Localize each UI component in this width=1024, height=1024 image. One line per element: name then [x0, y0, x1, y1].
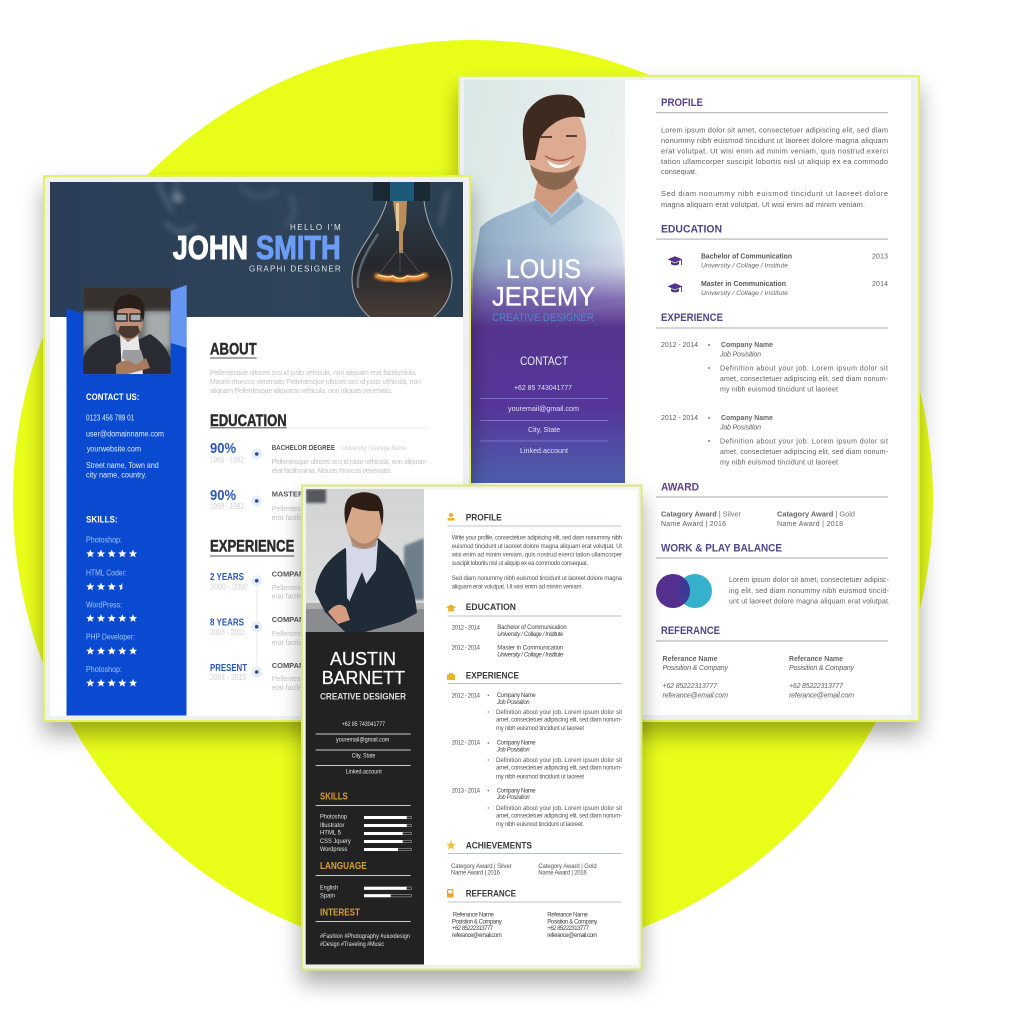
section: experience: COMPANY	[272, 570, 309, 579]
page sheet	[464, 80, 911, 715]
section: experience: Definition about your job. Lorem ipsum dolor sit	[720, 438, 888, 446]
section: experience: 2000 - 2002	[210, 582, 248, 591]
name block: JOHN	[173, 229, 248, 266]
section: education: Pellentesque ultrices	[272, 506, 337, 513]
section: achievements: Category Award | Silver	[451, 864, 512, 870]
section: about: ABOUT	[210, 340, 257, 358]
contact us block: 0123 456 789 01	[86, 414, 135, 423]
contact list: Linked.account	[346, 769, 382, 775]
language bars: English	[320, 885, 338, 891]
section: experience: amet, consectetuer adipiscing elit, sed diam nonum-	[720, 449, 889, 456]
section: profile: tation ullamcorper suscipit lobortis nisl ut aliquip ex ea commodo	[661, 157, 888, 166]
section: experience: erat facilisminia.	[272, 640, 322, 647]
section: profile: PROFILE	[466, 513, 502, 524]
skills bars: CSS Jquery	[320, 839, 351, 845]
section: achievements: ACHIEVEMENTS	[466, 840, 532, 851]
name block: HELLO I'M	[290, 223, 341, 232]
contact us block	[86, 392, 164, 480]
skills block: Photoshop:	[86, 536, 122, 545]
timeline marker	[251, 496, 262, 506]
interest tags: #Fashion #Photography #uiuxdesign	[320, 934, 410, 940]
section: education: 90%	[210, 440, 236, 457]
section: experience: 2004 - 2018	[210, 673, 246, 682]
section: referance: referance@email.com	[662, 692, 728, 699]
section: education: Bachelor of Communication	[497, 625, 567, 631]
section: experience: Definition about your job. Lorem ipsum dolor sit	[720, 366, 888, 372]
section: about: aliquam Pellentesque aliquacto vehicula, non aliquas venenatis.	[210, 388, 393, 395]
section: profile	[448, 513, 623, 590]
icon: graduation cap	[668, 283, 682, 292]
section: referance	[656, 625, 888, 699]
name: JEREMY	[492, 282, 595, 312]
card frame	[302, 486, 642, 970]
section: education: University / Collage / Institute	[701, 263, 788, 270]
interest tags: #Design #Traveling #Music	[320, 942, 384, 948]
section: education: Bachelor of Communication	[701, 254, 792, 261]
photo: man with glasses	[83, 287, 171, 374]
section: experience: amet, consectetuer adipiscing elit, sed diam nonum-	[496, 814, 622, 820]
section: referance: +62 85222313777	[547, 926, 590, 932]
skills block: SKILLS:	[86, 515, 118, 526]
name: BARNETT	[322, 668, 405, 688]
section: experience: Definition about your job. Lorem ipsum dolor sit	[496, 758, 622, 764]
section: experience: 2012 - 2014	[452, 741, 481, 747]
contact block: +62 85 743041777	[514, 383, 572, 392]
icon: star	[446, 840, 456, 850]
contact list: +62 85 743041777	[342, 722, 386, 728]
contact us block: user@domainname.com	[86, 430, 164, 439]
section: profile: consequat.	[661, 167, 697, 176]
contact list	[316, 722, 411, 775]
skills bars	[316, 791, 411, 853]
section: referance: Posistion & Company	[452, 919, 502, 925]
timeline marker	[251, 666, 262, 678]
job title: CREATIVE DESIGNER	[320, 691, 406, 701]
star rating: 5 stars	[86, 679, 137, 687]
section: referance: Referance Name	[789, 656, 843, 663]
page sheet	[306, 489, 638, 965]
section: work and play balance: ing elit, sed diam nonummy nibh euismod tincid-	[729, 588, 890, 595]
section: referance: Posisition & Company	[662, 665, 728, 672]
section: work and play balance	[656, 543, 890, 608]
section: award	[656, 482, 888, 528]
section: profile: Sed diam nonummy nibh euismod tincidunt ut laoreet dolore magna	[452, 576, 623, 582]
section: education: 1990 - 1992	[210, 502, 244, 511]
section: experience: 8 YEARS	[210, 618, 244, 629]
skills bars: Wordpress	[320, 847, 347, 853]
job title: CREATIVE DESIGNER	[492, 312, 594, 324]
section: experience: 2012 - 2014	[452, 693, 481, 699]
section: award: Name Award | 2016	[661, 521, 726, 528]
contact block: City, State	[528, 425, 560, 434]
timeline marker	[251, 575, 262, 586]
section: experience: 2003 - 2011	[210, 628, 245, 637]
section: education: Master in Communication	[701, 281, 786, 288]
section: experience	[447, 671, 622, 828]
blue sidebar	[66, 300, 186, 716]
section: education: 2012 - 2014	[452, 625, 481, 631]
section: experience: Pellentesque ultrices	[272, 631, 337, 638]
section: education: EDUCATION	[661, 224, 722, 236]
section: experience: 2013 - 2014	[452, 788, 481, 794]
contact list: youremail@gmail.com	[336, 738, 389, 744]
section: profile: Write your profile, consectetuer adipiscing elit, sed diam nonummy nibh	[452, 535, 622, 541]
language bars: LANGUAGE	[320, 861, 367, 872]
resume card: Austin Barnett	[302, 486, 642, 970]
section: profile: euismod tincidunt ut laoreet dolore magna aliquam erat volutpat. Ut	[452, 544, 622, 550]
skills block: WordPress:	[86, 600, 122, 609]
section: award: Catagory Award | Silver	[661, 512, 742, 519]
section: education: University / Collage / Institute	[701, 290, 788, 297]
section: referance: referance@email.com	[452, 933, 502, 939]
section: referance: referance@email.com	[789, 692, 854, 699]
contact list: City, State	[352, 754, 376, 760]
section: experience: EXPERIENCE	[661, 312, 723, 324]
section: experience	[656, 312, 889, 466]
section: award: Catagory Award | Gold	[777, 512, 855, 519]
section: education: 2014	[872, 281, 888, 288]
section: experience: Job Posisition	[496, 795, 530, 801]
section: award: Name Award | 2018	[777, 521, 843, 528]
dark sidebar	[306, 632, 424, 964]
section: experience: Definition about your job. Lorem ipsum dolor sit	[496, 806, 622, 812]
resume card: Louis Jeremy	[459, 76, 919, 721]
section: experience: Definition about your job. Lorem ipsum dolor sit	[496, 710, 622, 716]
section: referance: REFERANCE	[466, 889, 516, 900]
photo background	[464, 80, 625, 296]
star rating: 5 stars	[86, 647, 137, 655]
icon: person	[448, 513, 454, 521]
section: experience: EXPERIENCE	[466, 671, 519, 682]
contact block	[480, 354, 608, 455]
name block: SMITH	[256, 229, 341, 266]
section: experience: my nibh euismod tincidunt ut laoreet	[720, 460, 838, 466]
photo: man in dark suit	[306, 489, 424, 632]
section: referance: +62 85222313777	[789, 683, 844, 690]
contact block: Linked.account	[520, 446, 569, 455]
section: experience: my nibh euismod tincidunt ut laoreet	[496, 726, 584, 732]
section: profile: wisi enim ad minim veniam, quis nostrud exerci tation ullamcorper	[451, 553, 622, 559]
section: achievements	[446, 840, 622, 876]
section: experience: EXPERIENCE	[210, 538, 294, 556]
skills bars: Photoshop	[320, 815, 348, 821]
section: education: 2013	[872, 254, 888, 261]
section: referance: Referance Name	[547, 913, 589, 919]
name block: GRAPHI DESIGNER	[249, 265, 341, 274]
name: LOUIS	[506, 254, 581, 284]
section: experience: PRESENT	[210, 663, 247, 674]
contact block: youremail@gmail.com	[508, 404, 579, 413]
section: work and play balance: Lorem ipsum dolor sit amet, consectetuer adipisc-	[729, 577, 890, 584]
resume card: John Smith	[44, 176, 470, 721]
star rating: 3.5 stars	[86, 583, 122, 590]
interest tags: INTEREST	[320, 908, 360, 919]
icon: briefcase	[447, 673, 455, 680]
section: education: EDUCATION	[466, 602, 516, 613]
section: award: AWARD	[661, 482, 699, 494]
skills bars: HTML 5	[320, 831, 342, 837]
section: education: BACHELOR DEGREE	[272, 443, 335, 452]
section: experience: amet, consectetuer adipiscing elit, sed diam nonum-	[496, 718, 622, 724]
section: education: 1960 - 1992	[210, 456, 244, 465]
section: education: University / College Name.	[342, 446, 408, 452]
section: education: MASTER	[272, 490, 304, 499]
section: experience: Company Name	[497, 788, 536, 794]
timeline marker	[251, 448, 262, 460]
language bars	[316, 861, 411, 899]
header banner	[50, 182, 463, 320]
name: AUSTIN	[330, 649, 396, 669]
section: referance: Referance Name	[662, 656, 718, 663]
section: referance: +62 85222313777	[662, 683, 718, 690]
contact block: CONTACT	[520, 354, 569, 368]
section: referance: referance@email.com	[547, 933, 597, 939]
contact us block: yourwebsite.com	[87, 445, 141, 454]
section: referance: Referance Name	[453, 913, 495, 919]
section: education: Master in Communication	[497, 646, 563, 652]
blurred background bulbs	[158, 182, 448, 232]
icon: graduation cap	[446, 604, 456, 612]
skills block: Photoshop:	[86, 665, 122, 674]
section: education: University / Collage / Institute	[497, 632, 564, 638]
section: profile: magna aliquam erat volutpat. Ut wisi enim ad minim veniam.	[661, 200, 865, 209]
name	[322, 649, 405, 688]
photo: man in blue shirt	[473, 94, 626, 330]
section: education	[446, 602, 622, 659]
section: experience: COMPANY	[272, 661, 309, 670]
section: education	[210, 412, 429, 522]
section: experience: Company Name	[497, 741, 536, 747]
section: experience: Company Name	[721, 342, 773, 349]
icon: graduation cap	[668, 256, 682, 265]
section: profile: Sed diam nonummy nibh euismod tincidunt ut laoreet dolore	[661, 189, 888, 198]
page sheet	[50, 182, 463, 716]
section: achievements: Name Award | 2016	[451, 870, 501, 876]
section: experience: Job Posisition	[719, 352, 761, 359]
name	[492, 254, 595, 312]
section: education: erat facilisminia.	[272, 515, 322, 522]
section: experience: my nibh euismod tincidunt ut laoreet.	[496, 822, 584, 828]
section: experience: COMPANY	[272, 615, 309, 624]
skills block: HTML Coder:	[86, 568, 127, 577]
section: experience: Job Posisition	[496, 747, 530, 753]
section: profile: Lorem ipsum dolor sit amet, consectetuer adipiscing elit, sed diam	[661, 126, 888, 135]
section: experience: amet, consectetuer adipiscing elit, sed diam nonum-	[720, 376, 889, 383]
section: profile: aliquam erat volutpat. Ut wisi enim ad minim veniam.	[452, 584, 583, 590]
section: education: University / Collage / Institute	[497, 653, 564, 659]
section: experience: erat facilisminia.	[272, 594, 322, 601]
icon: phone	[447, 889, 454, 898]
purple gradient overlay	[464, 240, 625, 483]
section: education: EDUCATION	[210, 412, 287, 430]
name block	[173, 223, 341, 274]
section: referance: Posisition & Company	[789, 665, 854, 672]
card frame	[44, 176, 470, 721]
section: referance: +62 85222313777	[452, 926, 494, 932]
section: profile	[656, 97, 888, 209]
section: about: Mauris rhoncus venenatis Pellentesque ultrices orci id justo vehicula, non	[210, 379, 421, 386]
section: experience: my nibh euismod tincidunt ut laoreet	[496, 774, 584, 780]
card frame	[459, 76, 919, 721]
language bars: Spain	[320, 893, 335, 899]
light blue flap	[171, 285, 187, 348]
timeline marker	[251, 621, 262, 632]
section: education: 90%	[210, 487, 236, 504]
section: experience: 2012 - 2014	[661, 415, 698, 422]
section: profile: erat volutpat. Ut wisi enim ad minim veniam, quis nostrud exerci	[661, 146, 888, 156]
section: experience: amet, consectetuer adipiscing elit, sed diam nonum-	[496, 766, 622, 772]
section: about	[210, 340, 421, 395]
skills block: PHP Developer:	[86, 633, 135, 642]
section: experience: Job Posisition	[496, 700, 530, 706]
left portrait column	[464, 80, 626, 483]
star rating: 5 stars	[86, 550, 137, 557]
section: about: Pellentesque ultrices orci id justo vehicula, non aliquam erat facilisminia.	[210, 370, 417, 377]
section: experience: erat facilisminia.	[272, 685, 322, 692]
section: education: 2012 - 2014	[452, 646, 481, 652]
section: education	[656, 224, 888, 297]
section: education: erat facilisminia. Mauris rhoncus venenatis.	[272, 468, 392, 475]
section: education: Pellentesque ultrices orci id justo vehicula, non aliquam	[272, 459, 427, 466]
contact us block: city name, country.	[86, 471, 147, 480]
section: achievements: Category Award | Gold	[538, 864, 597, 870]
section: experience: 2 YEARS	[210, 572, 244, 583]
section: referance: Posistion & Company	[547, 919, 597, 925]
section: experience: Company Name	[497, 693, 536, 699]
skills block	[86, 515, 137, 687]
section: referance	[447, 889, 622, 939]
section: profile: nonummy nibh euismod tincidunt ut laoreet dolore magna aliquam	[661, 136, 888, 145]
section: experience: 2012 - 2014	[661, 342, 698, 349]
section: experience: Company Name	[721, 415, 773, 422]
section: referance: REFERANCE	[661, 625, 720, 637]
venn circles chart	[656, 574, 712, 608]
section: work and play balance: unt ut laoreet dolore magna aliquam erat volutpat.	[729, 598, 890, 606]
section: achievements: Name Award | 2016	[538, 870, 587, 876]
section: experience	[210, 538, 337, 692]
section: work and play balance: WORK & PLAY BALANCE	[661, 543, 782, 555]
section: profile: suscipit lobortis nisl ut aliquip ex ea commodo consequat.	[452, 561, 588, 567]
contact us block: CONTACT US:	[86, 392, 139, 403]
section: experience: my nibh euismod tincidunt ut laoreet	[720, 386, 838, 394]
icon: light bulb	[352, 182, 452, 320]
skills bars: SKILLS	[320, 791, 348, 802]
contact us block: Street name, Town and	[86, 461, 159, 470]
star rating: 5 stars	[86, 614, 137, 622]
skills bars: Illustrator	[320, 823, 344, 829]
section: profile: PROFILE	[661, 97, 703, 109]
section: experience: Pellentesque ultrices	[272, 585, 337, 592]
section: experience: Job Posisition	[719, 424, 761, 432]
section: experience: Pellentesque ultrices	[272, 676, 337, 683]
interest tags	[316, 908, 411, 948]
